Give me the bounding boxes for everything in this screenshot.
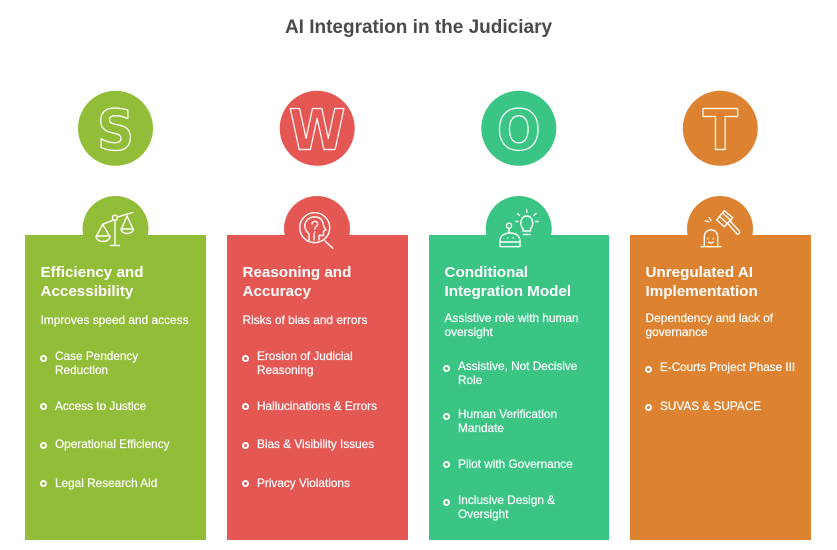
icon: scales of justice — [96, 212, 134, 246]
bullet list: Legal Research Aid — [55, 476, 157, 490]
O circle — [481, 91, 556, 166]
subtitle: Assistive role with human — [444, 310, 579, 324]
heading — [646, 264, 758, 300]
tab W — [284, 196, 350, 262]
heading — [444, 264, 571, 300]
heading: Accessibility — [40, 283, 133, 300]
heading — [242, 264, 351, 300]
bullet list: Operational Efficiency — [55, 437, 170, 451]
panel: weaknesses — [227, 235, 408, 540]
subtitle: governance — [646, 325, 708, 339]
W circle — [280, 91, 355, 166]
icon: gavel and figure — [701, 211, 740, 247]
title: AI Integration in the Judiciary — [285, 16, 552, 38]
heading: Implementation — [646, 283, 758, 300]
heading: Accuracy — [242, 283, 311, 300]
bullet list: Access to Justice — [55, 399, 146, 413]
S circle — [78, 91, 153, 166]
bullet list: Assistive, Not Decisive — [458, 359, 577, 373]
heading: Reasoning and — [242, 264, 351, 280]
heading: Unregulated AI — [646, 264, 753, 280]
bullet list: Pilot with Governance — [458, 457, 573, 471]
bullet list — [443, 359, 577, 521]
bullet list — [645, 361, 795, 413]
bullet list: Bias & Visibility Issues — [257, 437, 374, 451]
bullet list: Erosion of Judicial — [257, 349, 353, 363]
bullet list: Case Pendency — [55, 349, 138, 363]
bullet list: Inclusive Design & — [458, 493, 555, 507]
bullet list: Reduction — [55, 363, 108, 377]
panel: opportunities — [429, 235, 609, 540]
T circle: T — [703, 97, 738, 163]
subtitle — [444, 310, 579, 339]
panel: threats — [630, 235, 811, 540]
tab T — [687, 196, 753, 262]
heading: Integration Model — [444, 283, 571, 300]
subtitle: oversight — [444, 324, 493, 338]
T circle — [683, 91, 758, 166]
bullet list: Human Verification — [458, 406, 557, 420]
subtitle: Dependency and lack of — [646, 311, 773, 325]
bullet list: Reasoning — [257, 363, 313, 377]
heading — [40, 264, 143, 300]
subtitle: Improves speed and access — [40, 312, 189, 326]
bullet list: Privacy Violations — [257, 476, 350, 490]
bullet list — [40, 349, 170, 490]
subtitle: Risks of bias and errors — [242, 312, 367, 326]
icon: robot and light bulb — [500, 210, 538, 247]
bullet list: Role — [458, 373, 482, 387]
W circle: W — [289, 97, 346, 163]
O circle: O — [497, 97, 541, 163]
bullet list: SUVAS & SUPACE — [660, 399, 761, 413]
heading: Efficiency and — [40, 264, 143, 280]
bullet list: Oversight — [458, 507, 508, 521]
panel: strengths — [25, 235, 206, 540]
bullet list — [242, 349, 377, 490]
heading: Conditional — [444, 264, 528, 280]
S circle: S — [97, 97, 134, 163]
subtitle — [646, 311, 774, 339]
bullet list: Hallucinations & Errors — [257, 399, 377, 413]
tab S — [82, 196, 148, 262]
tab O — [486, 196, 552, 262]
bullet list: E-Courts Project Phase III — [660, 361, 795, 374]
icon: head with question mark under magnifier — [300, 213, 333, 248]
bullet list: Mandate — [458, 420, 504, 434]
